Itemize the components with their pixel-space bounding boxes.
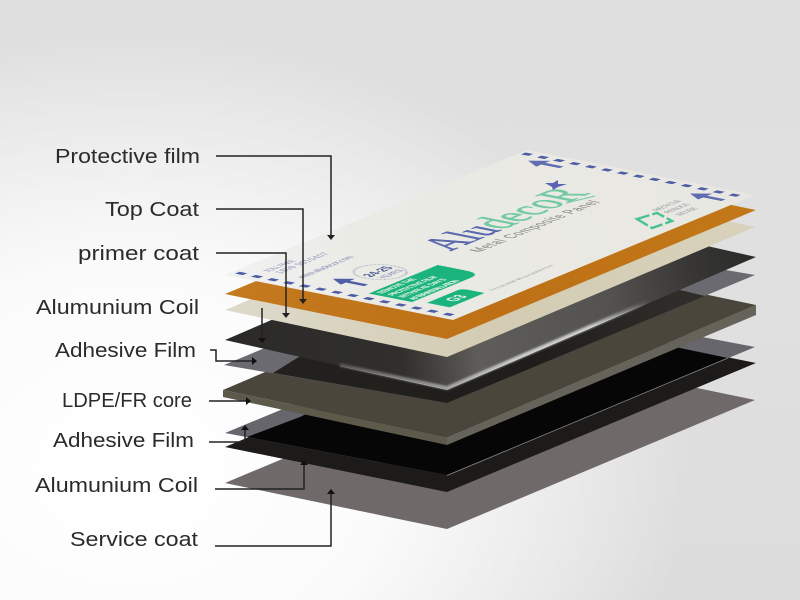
- label: Adhesive Film lower: [53, 425, 249, 452]
- recycle text: REUSE: [672, 207, 701, 216]
- label: Service coat: Service coat: [70, 529, 198, 551]
- notice text: AFTER INSTALLATION: [406, 279, 462, 300]
- label: primer coat: [78, 243, 290, 318]
- label: Alumunium Coil lower: Alumunium Coil: [35, 475, 198, 497]
- small print: For more details visit www.aludecor.com: [488, 264, 557, 291]
- recycle text: [650, 199, 708, 216]
- layer: upper adhesive film: [224, 237, 755, 403]
- layer: protective film: [225, 150, 755, 320]
- green code box: [427, 289, 485, 307]
- recycle text: RECYCLE: [650, 199, 685, 212]
- label: Alumunium Coil upper: Alumunium Coil: [36, 297, 199, 319]
- back edge dashes: [521, 152, 741, 197]
- label: Alumunium Coil lower: [35, 460, 308, 497]
- notice text: [374, 273, 462, 300]
- icon: direction arrow back bottom: [683, 191, 730, 203]
- logo tagline: Metal Composite Panel: [465, 199, 604, 253]
- layer: lower adhesive film: [225, 305, 755, 476]
- icon: recycle: [637, 213, 672, 228]
- warranty badge: 24-25: [358, 265, 398, 278]
- logo wordmark: AludecoR: [406, 184, 602, 253]
- notice text: PROTECTIVE FILM: [385, 275, 440, 296]
- layer: LDPE/FR core: [223, 258, 756, 445]
- logo star: [545, 180, 567, 190]
- icon: direction arrow back top: [521, 158, 569, 170]
- logo flourish: [566, 196, 595, 203]
- layer: lower aluminium coil: [225, 318, 756, 492]
- layer: primer coat: [225, 180, 755, 357]
- icon: direction arrow front: [326, 276, 373, 288]
- notice text: WITHIN 45 DAYS: [395, 278, 450, 298]
- contact text: [261, 249, 357, 279]
- label: primer coat: primer coat: [78, 243, 200, 265]
- label: LDPE/FR core: LDPE/FR core: [62, 390, 192, 412]
- label: Alumunium Coil upper: [36, 297, 266, 343]
- contact text: TOLL FREE: [261, 259, 299, 273]
- warranty badge: YEARS: [376, 269, 406, 279]
- green notice box: [369, 265, 481, 302]
- printed artwork on protective film: [234, 152, 742, 316]
- layer: top coat: [225, 165, 756, 339]
- front edge dashes: [235, 272, 455, 316]
- label: Service coat: [70, 489, 335, 551]
- label: Adhesive Film upper: [55, 340, 257, 365]
- label: Adhesive Film upper: Adhesive Film: [55, 340, 196, 362]
- label: Protective film: Protective film: [55, 146, 200, 168]
- label: Top Coat: [105, 199, 307, 304]
- green code box: G3: [441, 294, 472, 303]
- label: Protective film: [55, 146, 335, 240]
- label: Adhesive Film lower: Adhesive Film: [53, 430, 194, 452]
- warranty badge: [344, 262, 417, 282]
- contact text: www.aludecor.com: [293, 255, 357, 279]
- notice text: REMOVE THE: [374, 277, 419, 294]
- label: Top Coat: Top Coat: [105, 199, 200, 221]
- layer stack: [223, 150, 756, 529]
- recycle text: REDUCE: [661, 203, 693, 214]
- contact text: 1800 9015407: [272, 252, 332, 274]
- label: LDPE/FR core: [62, 390, 251, 412]
- layer: service coat: [225, 354, 755, 529]
- layer: upper aluminium coil: [225, 207, 756, 390]
